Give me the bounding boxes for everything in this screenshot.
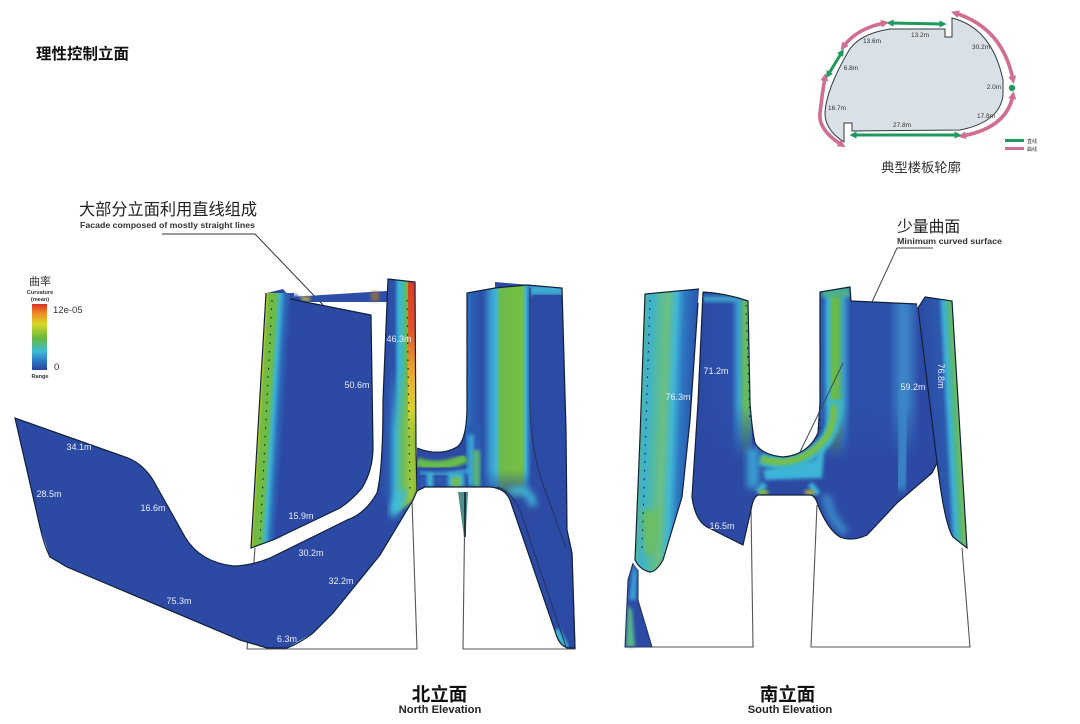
title: 理性控制立面	[36, 44, 129, 63]
north measurement labels	[36, 334, 412, 644]
north top connecting strip	[271, 289, 387, 302]
segment length labels: 30.2m	[972, 44, 990, 51]
south measurement labels: 59.2m	[900, 382, 926, 392]
legend: curvature colour scale: 曲率	[29, 274, 51, 288]
callout: straight lines: Facade composed of mostly straight lines	[80, 220, 255, 230]
floor plate shape	[825, 18, 1003, 142]
north measurement labels: 32.2m	[328, 576, 354, 586]
panel: typical floor plate outline	[820, 13, 1037, 175]
north sweeping lower surface and tower	[15, 275, 420, 648]
legend: curvature colour scale: Curvature	[27, 290, 53, 296]
south measurement labels: 76.8m	[936, 363, 946, 389]
south lower sliver	[625, 563, 652, 647]
north measurement labels: 15.9m	[288, 511, 314, 521]
panel: north elevation	[15, 275, 575, 716]
segment length labels: 2.0m	[987, 84, 1001, 91]
callout: curved surface: Minimum curved surface	[897, 237, 1002, 246]
south measurement labels	[665, 363, 946, 531]
legend: curvature colour scale: Range	[31, 374, 49, 380]
north measurement labels: 50.6m	[344, 380, 370, 390]
south right strip	[918, 297, 967, 548]
south central panel	[690, 285, 938, 545]
north measurement labels: 46.3m	[386, 334, 412, 344]
south elevation heading	[748, 684, 832, 716]
legend: line types: 曲线	[1027, 146, 1037, 153]
legend: curvature colour scale: 12e-05	[53, 305, 83, 316]
straight segment arrows	[828, 23, 1015, 135]
segment length labels: 16.7m	[828, 105, 846, 112]
curved surface leader inside panel	[800, 363, 843, 452]
south measurement labels: 76.3m	[665, 392, 691, 402]
north elevation heading: 北立面	[412, 684, 467, 705]
north measurement labels: 30.2m	[298, 548, 324, 558]
small sliver below bridge	[458, 492, 468, 537]
segment length labels: 13.2m	[911, 32, 929, 39]
south measurement labels: 71.2m	[703, 366, 729, 376]
segment length labels: 6.8m	[844, 65, 858, 72]
legend: curvature colour scale: (mean)	[31, 297, 49, 303]
legend: curvature colour scale: 0	[54, 362, 59, 373]
north measurement labels: 28.5m	[36, 489, 62, 499]
south left strip	[635, 289, 699, 572]
legend: line types: 直线	[1027, 138, 1037, 145]
callout: curved surface: 少量曲面	[897, 218, 960, 236]
callout: curved surface	[872, 218, 1002, 302]
north elevation heading	[399, 684, 482, 716]
south measurement labels: 16.5m	[709, 521, 735, 531]
legend: curvature colour scale	[27, 274, 83, 380]
south elevation heading: South Elevation	[748, 704, 832, 716]
north right tower and bridge	[417, 280, 575, 655]
north measurement labels: 6.3m	[277, 634, 297, 644]
north measurement labels: 75.3m	[166, 596, 192, 606]
north elevation heading: North Elevation	[399, 704, 482, 716]
south base outlines	[625, 505, 970, 647]
floor plate caption: 典型楼板轮廓	[881, 159, 961, 175]
panel: south elevation	[625, 285, 970, 716]
curved segment arrows	[820, 13, 1013, 145]
north tall left panel	[251, 290, 373, 548]
segment length labels: 13.6m	[863, 38, 881, 45]
callout: straight lines	[79, 201, 323, 305]
south elevation heading: 南立面	[760, 684, 815, 705]
segment length labels: 27.8m	[893, 122, 911, 129]
segment length labels: 17.8m	[977, 113, 995, 120]
legend: line types	[1005, 138, 1037, 153]
north base outlines	[247, 493, 575, 649]
callout: straight lines: 大部分立面利用直线组成	[79, 201, 257, 219]
segment length labels	[828, 32, 1001, 129]
north measurement labels: 34.1m	[66, 442, 92, 452]
north measurement labels: 16.6m	[140, 503, 166, 513]
